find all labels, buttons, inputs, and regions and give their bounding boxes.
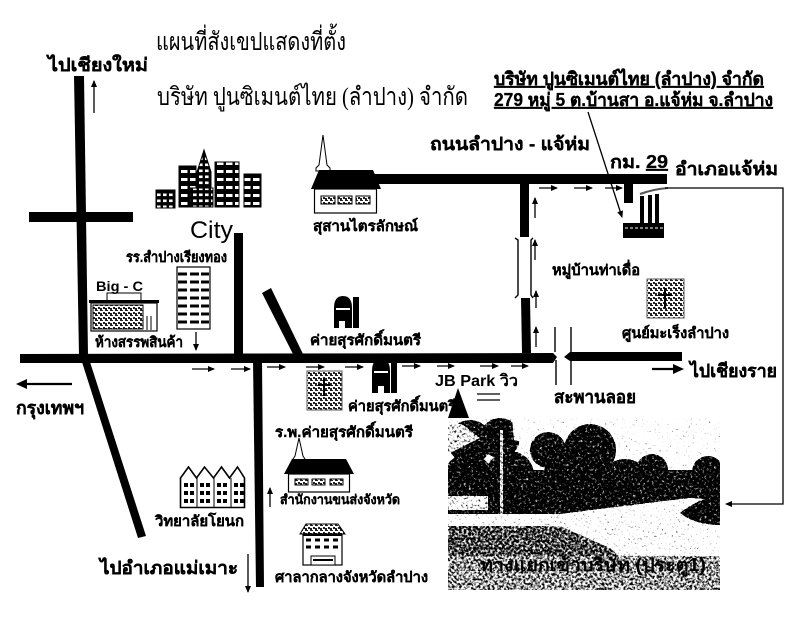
road labels: กม. 29 bbox=[610, 152, 668, 172]
icon: city hall bbox=[300, 524, 345, 565]
label: transport office: สำนักงานขนส่งจังหวัด bbox=[280, 492, 400, 507]
label: village: หมู่บ้านท่าเดื่อ bbox=[552, 259, 640, 279]
label: camp 2: ค่ายสุรศักดิ์มนตรี bbox=[348, 395, 456, 415]
label: cemetery: สุสานไตรลักษณ์ bbox=[313, 217, 419, 235]
icon: hospital bbox=[307, 371, 342, 410]
arrow: address to factory bbox=[588, 112, 622, 217]
label: Big-C: Big - C bbox=[96, 278, 143, 294]
label: shopping mall: ห้างสรรพสินค้า bbox=[95, 334, 183, 351]
direction arrows bbox=[16, 81, 684, 592]
title: แผนที่สังเขปแสดงที่ตั้ง bbox=[156, 23, 346, 56]
road labels: สะพานลอย bbox=[554, 387, 636, 407]
company address callout bbox=[494, 68, 773, 112]
road labels: อำเภอแจ้ห่ม bbox=[675, 159, 778, 179]
icon: temple at cemetery bbox=[311, 135, 381, 213]
icon: factory bbox=[623, 188, 668, 238]
title: บริษัท ปูนซิเมนต์ไทย (ลำปาง) จำกัด bbox=[157, 82, 468, 112]
label: JB Park: JB Park วิว bbox=[435, 372, 518, 390]
double line mark bbox=[477, 394, 500, 400]
company address callout: บริษัท ปูนซิเมนต์ไทย (ลำปาง) จำกัด bbox=[494, 68, 764, 91]
icon: cancer centre building bbox=[647, 279, 684, 318]
road labels: ไปอำเภอแม่เมาะ bbox=[98, 557, 238, 578]
road labels: ถนนลำปาง - แจ้ห่ม bbox=[430, 134, 590, 154]
icon: city skyline bbox=[156, 150, 261, 208]
photo: company entrance bbox=[442, 418, 724, 590]
label: camp: ค่ายสุรศักดิ์มนตรี bbox=[310, 329, 421, 349]
icon: school building bbox=[177, 267, 210, 329]
roads bbox=[20, 76, 682, 587]
icon: temple at transport office bbox=[284, 438, 354, 492]
icon: college terrace houses bbox=[180, 467, 244, 508]
label: hospital: ร.พ.ค่ายสุรศักดิ์มนตรี bbox=[275, 421, 413, 441]
title bbox=[156, 23, 468, 112]
label: city hall: ศาลากลางจังหวัดลำปาง bbox=[275, 569, 428, 586]
label: school: รร.สำปางเรียงทอง bbox=[126, 249, 227, 266]
road labels: ไปเชียงราย bbox=[688, 360, 777, 381]
bridge markings bbox=[515, 238, 571, 385]
company address callout: 279 หมู่ 5 ต.บ้านสา อ.แจ้ห่ม จ.ลำปาง bbox=[494, 90, 773, 112]
icon: Big-C store bbox=[89, 293, 159, 331]
photo caption: ทางแยกเข้าบริษัท (ประตู1) bbox=[480, 555, 706, 577]
icon: pine tree bbox=[448, 388, 469, 418]
icon: camp building 2 bbox=[372, 359, 397, 393]
icon: camp building bbox=[334, 296, 359, 328]
label: cancer centre: ศูนย์มะเร็งลำปาง bbox=[622, 323, 729, 342]
city label: City bbox=[190, 217, 233, 244]
road labels: ไปเชียงใหม่ bbox=[46, 54, 148, 75]
route line to company entrance bbox=[665, 188, 783, 504]
road labels: กรุงเทพฯ bbox=[16, 398, 84, 420]
label: college: วิทยาลัยโยนก bbox=[154, 512, 244, 530]
